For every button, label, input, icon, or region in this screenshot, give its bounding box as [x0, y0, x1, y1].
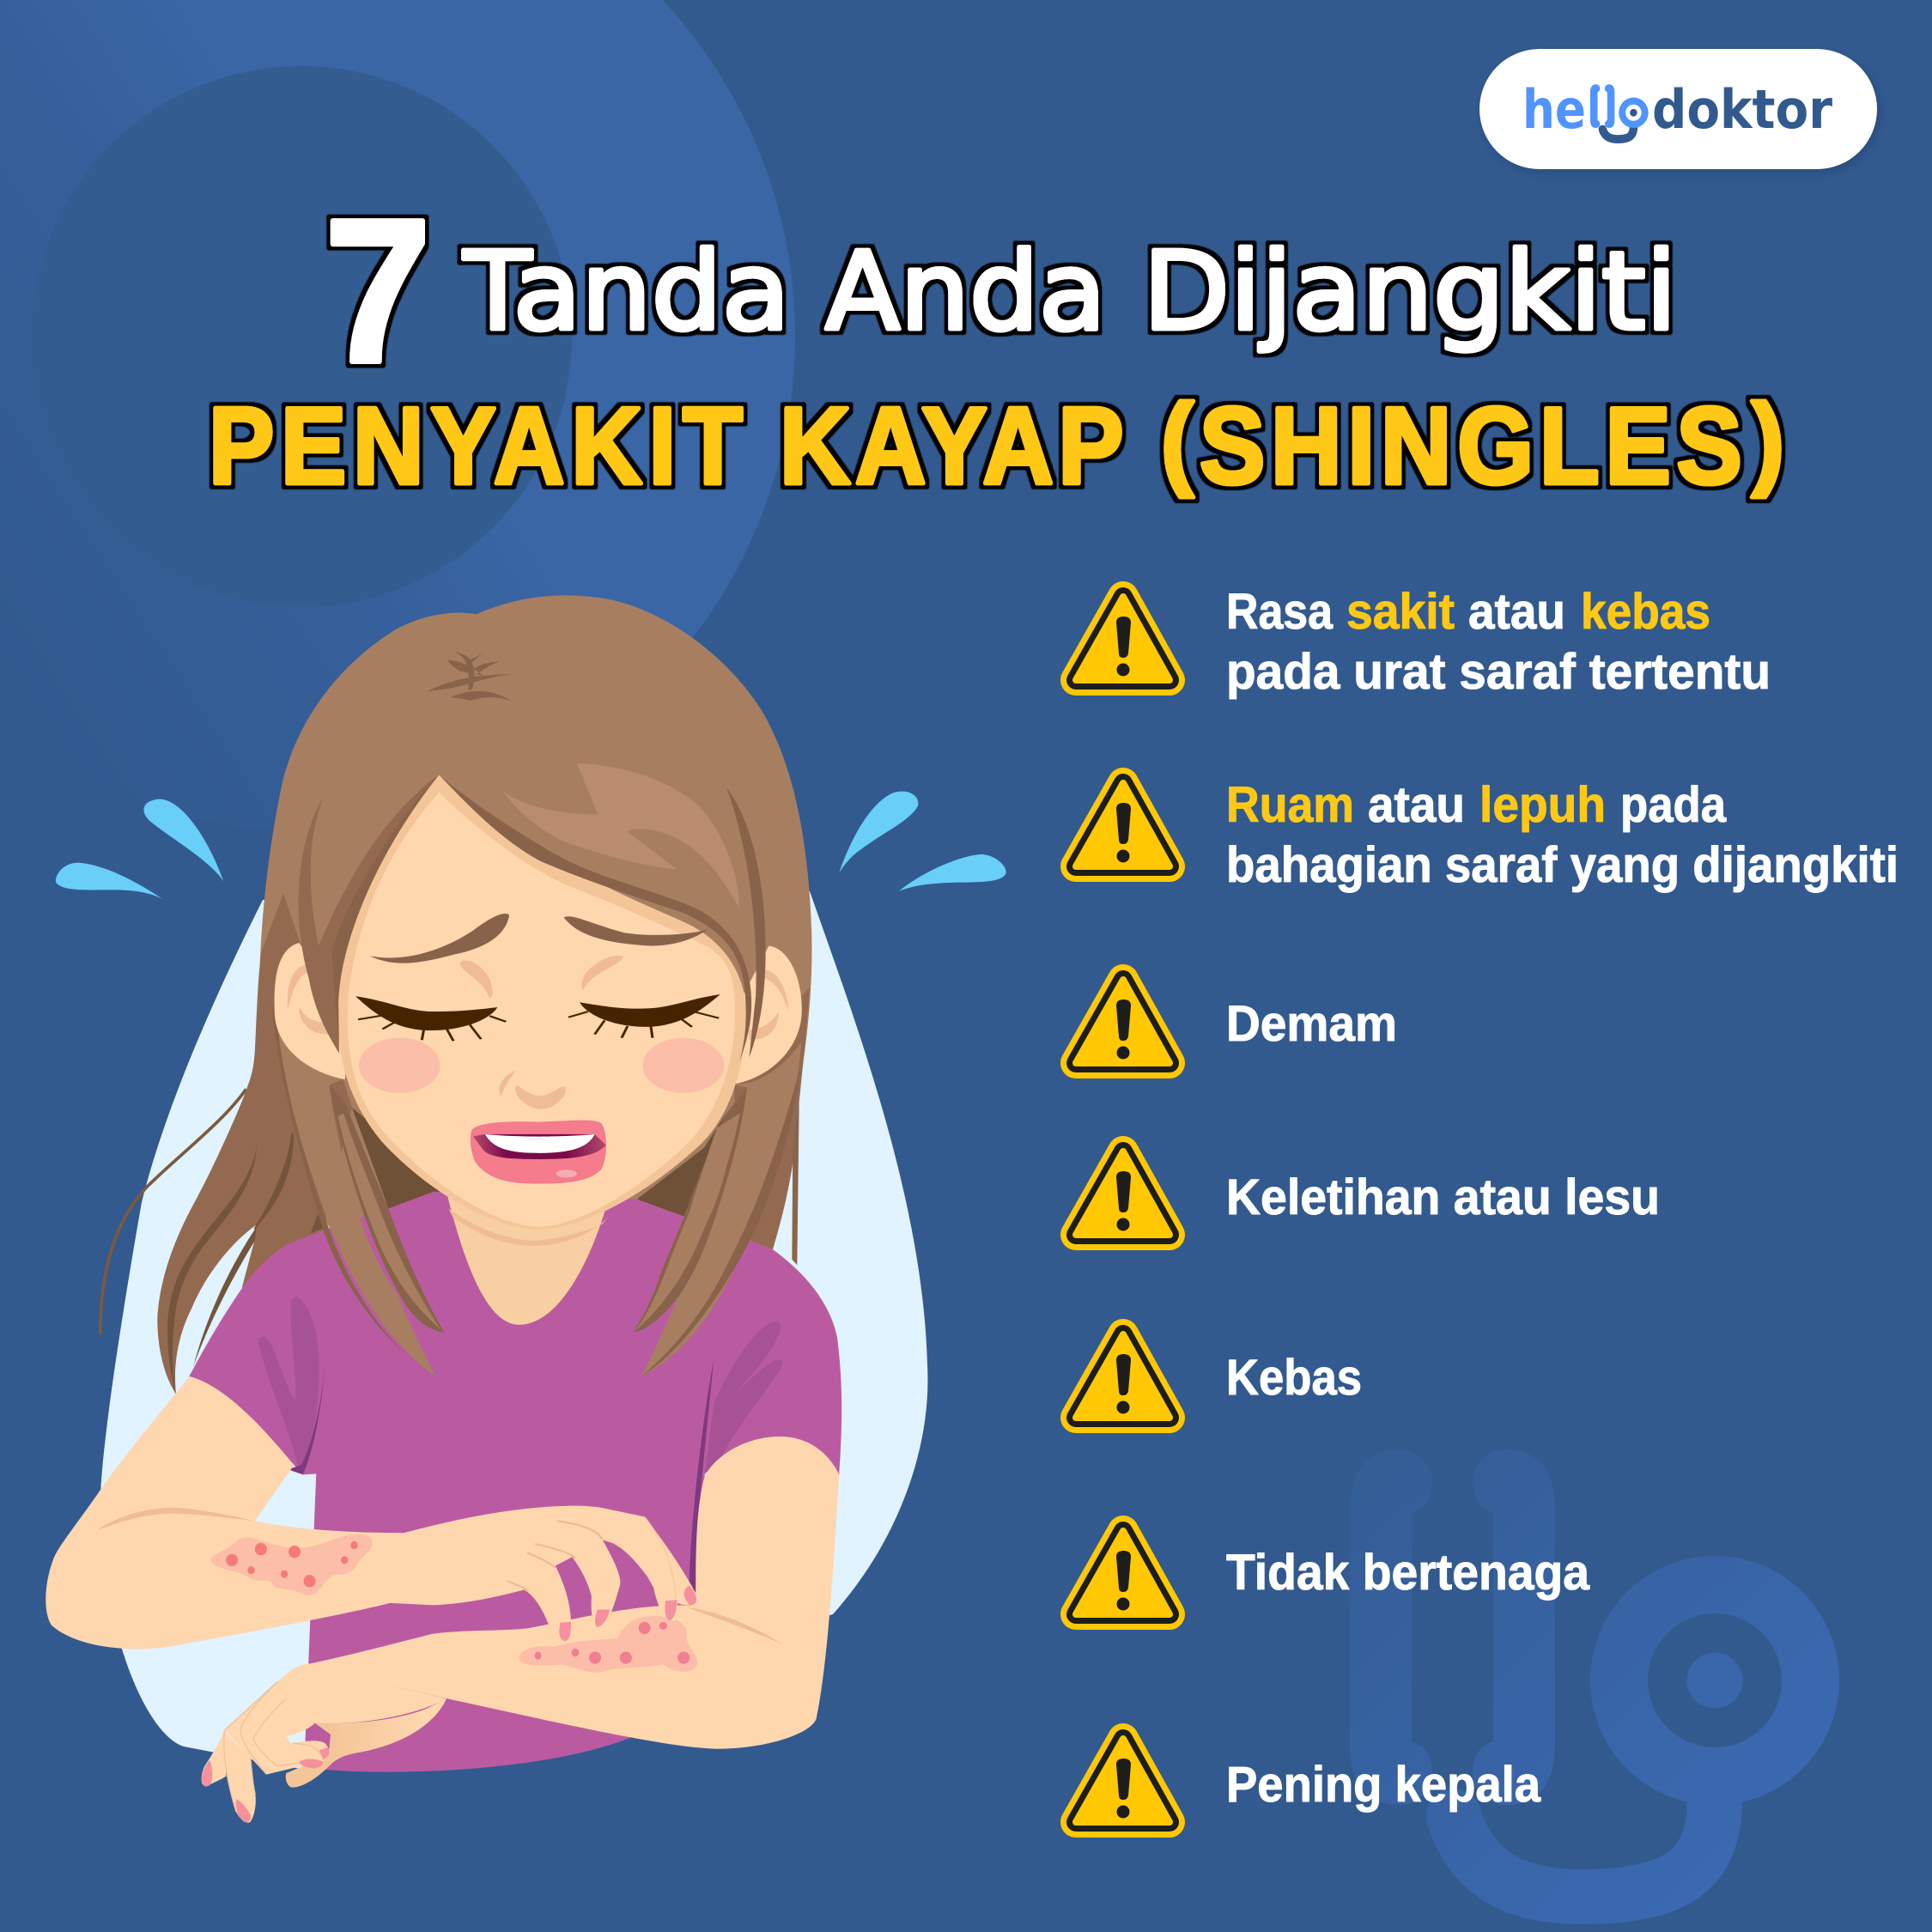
symptom 7: Pening kepala	[1226, 1757, 1541, 1813]
title: )	[1752, 382, 1784, 498]
warning icon 1	[1076, 597, 1170, 680]
face	[348, 793, 735, 1227]
mouth	[471, 1121, 606, 1184]
hair highlight	[502, 763, 739, 908]
right hair strand	[726, 787, 766, 1058]
warning icon 4	[1076, 1151, 1170, 1235]
body: shirt and arms	[46, 1176, 841, 1772]
left dark hair panel	[298, 775, 439, 1054]
upper arm and scratching hand	[46, 1376, 697, 1649]
right front hair lock	[633, 1042, 801, 1376]
teardrop left lower	[56, 863, 162, 899]
symptom 2: Ruam atau lepuh pada bahagian saraf yang dijangkiti: lepuh	[1479, 777, 1606, 833]
title: KAYAP	[780, 385, 1124, 507]
logo: hellodoktor	[1479, 49, 1877, 169]
neck	[443, 1176, 615, 1325]
title: SHINGLES	[1200, 385, 1742, 507]
symptom 1: Rasa sakit atau kebas pada urat saraf tertentu: kebas	[1581, 584, 1710, 640]
symptom 2: Ruam atau lepuh pada bahagian saraf yang dijangkiti: pada	[1620, 777, 1727, 833]
warning icon 5	[1076, 1334, 1170, 1418]
symptom 1: Rasa sakit atau kebas pada urat saraf tertentu: atau	[1468, 584, 1565, 640]
title	[209, 178, 1784, 507]
symptom 1: Rasa sakit atau kebas pada urat saraf tertentu: sakit	[1346, 584, 1455, 640]
warning icon 7	[1076, 1739, 1170, 1822]
title: Dijangkiti	[1143, 228, 1677, 355]
stethoscope watermark	[1350, 1449, 1839, 1897]
head hair, back layer	[259, 595, 811, 1281]
hair part detail	[427, 648, 513, 702]
right closed eye	[568, 994, 720, 1038]
rash on lower arm	[519, 1616, 697, 1673]
nose	[499, 1071, 566, 1109]
symptom 1: Rasa sakit atau kebas pada urat saraf tertentu: Rasa	[1226, 584, 1334, 640]
lower arm	[305, 1437, 839, 1749]
title: Tanda	[463, 228, 790, 355]
title: 7	[325, 178, 431, 405]
right ear	[729, 946, 802, 1084]
rash on upper arm	[211, 1534, 373, 1595]
head	[56, 648, 1006, 1230]
left back hair and strands	[100, 893, 447, 1394]
symptom 1: Rasa sakit atau kebas pada urat saraf tertentu	[1226, 584, 1771, 700]
logo: hellodoktor: he	[1522, 78, 1586, 141]
left closed eye	[355, 996, 506, 1041]
warning icon 6	[1076, 1531, 1170, 1614]
cheeks	[359, 1038, 724, 1093]
symptom 2: Ruam atau lepuh pada bahagian saraf yang dijangkiti: Ruam	[1226, 777, 1354, 833]
nails of scratching hand	[559, 1585, 696, 1641]
teardrop right upper	[839, 792, 918, 872]
shirt	[189, 1192, 841, 1772]
title: PENYAKIT	[209, 385, 743, 507]
lower hand with fingers	[202, 1664, 447, 1823]
light blue blob behind the girl	[100, 891, 927, 1769]
left ear	[275, 943, 349, 1079]
decorative inner circle	[31, 66, 572, 607]
face shadow	[337, 775, 746, 1230]
symptom 1: Rasa sakit atau kebas pada urat saraf tertentu: pada urat saraf tertentu	[1226, 644, 1771, 700]
teardrop left upper	[143, 799, 223, 882]
symptom 4: Keletihan atau lesu	[1226, 1170, 1660, 1225]
hairline shadow	[331, 775, 751, 1062]
symptom 2: Ruam atau lepuh pada bahagian saraf yang dijangkiti: bahagian saraf yang dijangkiti	[1226, 837, 1899, 893]
right eyebrow	[564, 916, 708, 946]
warning icon 3	[1076, 980, 1170, 1063]
title: (	[1161, 382, 1194, 498]
symptom 2: Ruam atau lepuh pada bahagian saraf yang dijangkiti: atau	[1368, 777, 1465, 833]
title: Anda	[825, 228, 1106, 355]
right back hair and strand	[637, 987, 810, 1265]
symptom 2: Ruam atau lepuh pada bahagian saraf yang dijangkiti	[1226, 777, 1899, 893]
teardrop right lower	[899, 854, 1006, 891]
left eyebrow	[370, 914, 509, 963]
symptom 6: Tidak bertenaga	[1226, 1545, 1590, 1601]
symptom 3: Demam	[1226, 996, 1397, 1052]
frown lines	[460, 956, 623, 999]
sleeve folds	[258, 1297, 783, 1605]
warning icon 2	[1076, 783, 1170, 866]
decorative large circle	[0, 0, 795, 830]
illustration: girl scratching rash	[46, 595, 1006, 1823]
logo: hellodoktor: doktor	[1652, 78, 1832, 141]
left front hair lock	[271, 1002, 444, 1376]
symptom 5: Kebas	[1226, 1350, 1362, 1406]
